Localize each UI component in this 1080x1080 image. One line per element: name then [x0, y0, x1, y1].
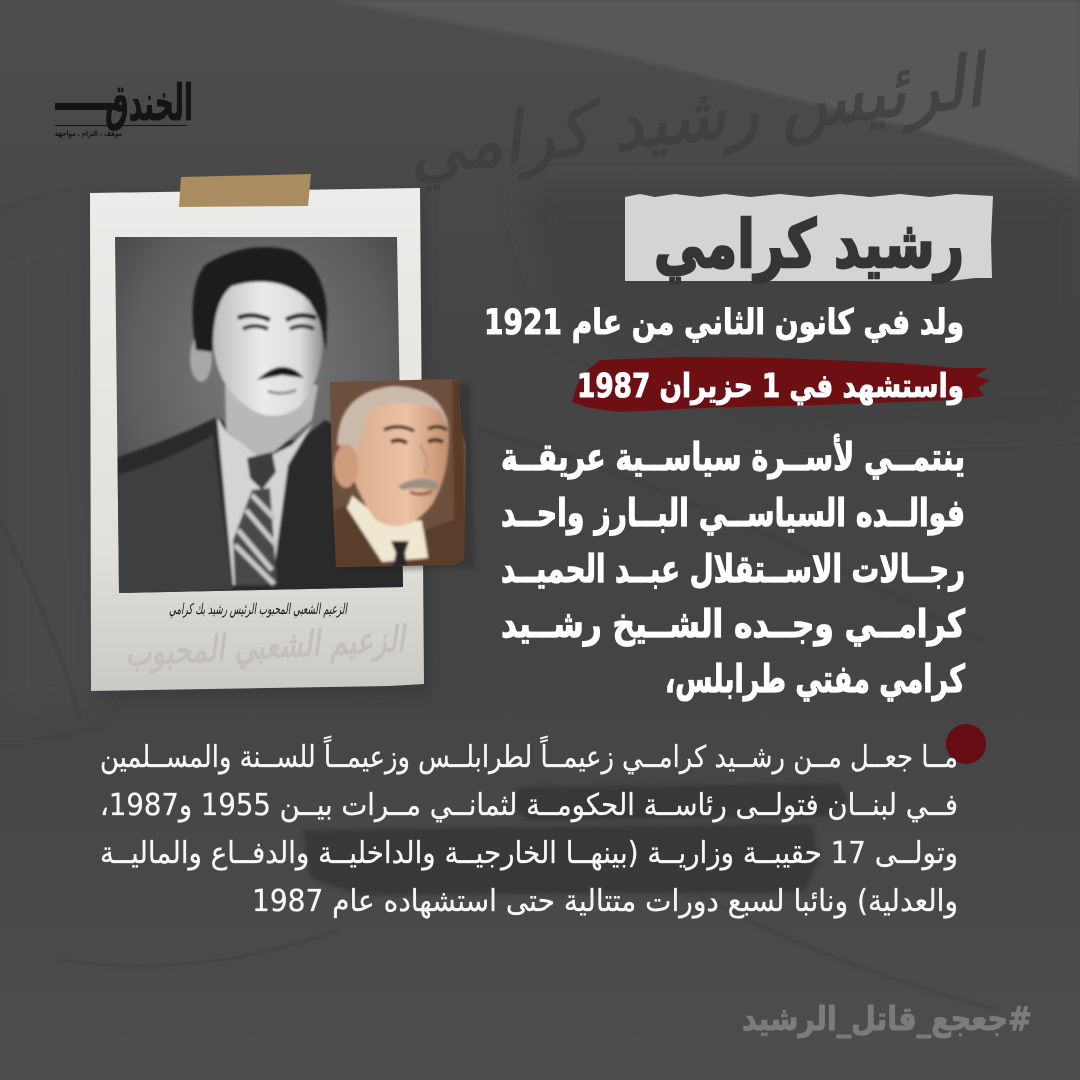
hashtag: #جعجع_قاتل_الرشيد — [742, 999, 1032, 1039]
family paragraph: كرامي مفتي طرابلس، — [665, 657, 966, 701]
eyes — [391, 440, 443, 443]
family paragraph: كرامــي وجــده الشــيخ رشــيد — [501, 602, 966, 647]
death line: واستشهد في 1 حزيران 1987 — [577, 366, 964, 406]
black and white portrait — [110, 232, 410, 600]
leadership paragraph — [100, 735, 958, 919]
birth line: ولد في كانون الثاني من عام 1921 — [484, 303, 964, 343]
moustache — [398, 479, 438, 490]
neck — [225, 385, 318, 462]
tie — [247, 452, 276, 490]
card shadow — [92, 194, 430, 698]
shirt — [217, 417, 313, 585]
eyebrows — [238, 315, 316, 320]
shirt — [347, 495, 428, 562]
paper card — [90, 188, 424, 691]
suit — [115, 417, 405, 600]
photo card — [90, 174, 475, 698]
leadership paragraph: فــي لبنــان فتولــى رئاســة الحكومــة لثمانــي مــرات بيــن 1955 و1987، — [100, 788, 958, 823]
ear — [334, 444, 358, 488]
watermark: faded calligraphy name: الرئيس رشيد كرامي — [403, 38, 994, 193]
title on torn paper — [625, 194, 993, 283]
red brush highlight — [572, 357, 990, 412]
moustache — [257, 367, 304, 380]
brows — [384, 427, 447, 431]
printed caption: الزعيم الشعبي المحبوب الرئيس رشيد بك كرامي — [169, 600, 348, 618]
logo: Al-Khandaq — [55, 74, 193, 138]
logo: Al-Khandaq: موقف . التزام . مواجهة — [55, 129, 122, 138]
leadership paragraph: والعدلية) ونائبا لسبع دورات متتالية حتى استشهاده عام 1987 — [252, 884, 958, 919]
red bullet — [946, 724, 986, 764]
face — [213, 282, 323, 416]
hair — [337, 386, 449, 450]
nose — [420, 445, 427, 474]
leadership paragraph: وتولــى 17 حقيبــة وزاريــة (بينهــا الخارجيــة والداخليــة والدفــاع والماليــة — [100, 836, 958, 871]
head — [352, 401, 451, 528]
faded stamp text: الزعيم الشعبي المحبوب — [124, 619, 410, 676]
logo: Al-Khandaq: الخندق — [105, 74, 193, 132]
hair — [193, 247, 327, 352]
lips — [268, 390, 296, 393]
color portrait — [330, 379, 466, 567]
masking tape — [179, 174, 311, 207]
color portrait shadow — [332, 384, 474, 572]
coat — [333, 505, 466, 567]
family paragraph — [501, 433, 966, 701]
ear — [190, 334, 212, 382]
tie — [391, 541, 409, 567]
torn paper strip — [625, 194, 993, 281]
leadership paragraph: مــا جعــل مــن رشــيد كرامــي زعيمــاً لطرابلــس وزعيمــاً للســنة والمســلمين — [100, 735, 958, 775]
eyes — [243, 326, 314, 329]
title name: رشيد كرامي — [654, 206, 964, 283]
mouth — [410, 491, 432, 494]
